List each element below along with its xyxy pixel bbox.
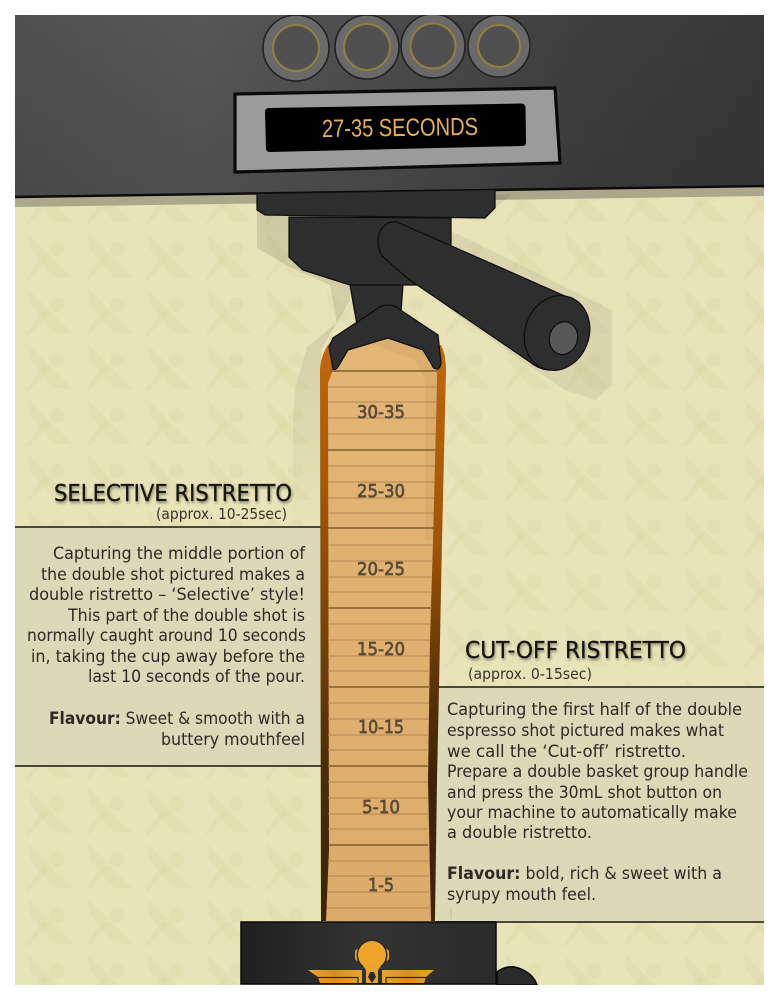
shot time scale lines xyxy=(327,387,437,908)
shot time labels: 15-20 xyxy=(357,640,405,660)
timer display xyxy=(235,88,560,172)
text: cut-off ristretto description: Capturing the first half of the double xyxy=(447,700,742,719)
logo emblem xyxy=(308,940,434,984)
timer display: 27-35 SECONDS xyxy=(322,113,478,143)
text: selective ristretto description: This part of the double shot is xyxy=(67,606,305,625)
heading: cut-off ristretto xyxy=(465,636,686,683)
handle grip xyxy=(378,222,600,380)
base block xyxy=(241,922,537,985)
espresso shot stream xyxy=(320,338,446,921)
text: cut-off ristretto description: and press the 30mL shot button on xyxy=(447,783,722,802)
shot time labels: 20-25 xyxy=(357,560,405,580)
text: selective ristretto description: in, taking the cup away before the xyxy=(31,647,305,666)
text: selective ristretto description xyxy=(27,544,306,749)
group handle xyxy=(257,190,600,380)
text: cut-off ristretto description xyxy=(447,700,748,904)
shot time labels: 25-30 xyxy=(357,482,405,502)
text: selective ristretto description: buttery mouthfeel xyxy=(161,730,305,749)
drop shadows of group handle and shot xyxy=(257,194,612,527)
shot time labels: 30-35 xyxy=(357,403,405,423)
text: cut-off ristretto description: syrupy mouth feel. xyxy=(447,885,596,904)
shot time labels: 1-5 xyxy=(368,876,394,896)
text: cut-off ristretto description: Prepare a double basket group handle xyxy=(447,762,748,781)
text: cut-off ristretto description: your machine to automatically make xyxy=(447,803,737,822)
panel: cut-off ristretto background xyxy=(436,686,764,923)
panel: selective ristretto background xyxy=(15,526,321,767)
machine body xyxy=(15,15,764,197)
shot time labels: 5-10 xyxy=(362,798,400,818)
group head buttons xyxy=(263,14,530,81)
text: selective ristretto description: last 10 seconds of the pour. xyxy=(88,667,305,686)
text: selective ristretto description: the double shot pictured makes a xyxy=(41,565,305,584)
text: selective ristretto description: normally caught around 10 seconds xyxy=(27,626,306,645)
text: selective ristretto description: Capturing the middle portion of xyxy=(53,544,306,563)
heading: selective ristretto: (approx. 10-25sec) xyxy=(156,505,287,523)
shot time labels xyxy=(357,403,405,896)
text: cut-off ristretto description: Flavour: bold, rich & sweet with a xyxy=(447,864,722,883)
text: selective ristretto description: double ristretto – ‘Selective’ style! xyxy=(29,585,305,604)
machine shadow xyxy=(15,186,764,207)
heading: cut-off ristretto: (approx. 0-15sec) xyxy=(468,665,592,683)
text: cut-off ristretto description: espresso shot pictured makes what xyxy=(447,721,724,740)
heading: selective ristretto: SELECTIVE RISTRETTO xyxy=(54,479,292,507)
heading: selective ristretto xyxy=(54,479,292,523)
shot time labels: 10-15 xyxy=(358,718,404,738)
text: selective ristretto description: Flavour: Sweet & smooth with a xyxy=(49,709,305,728)
heading: cut-off ristretto: CUT-OFF RISTRETTO xyxy=(465,636,686,664)
text: cut-off ristretto description: a double ristretto. xyxy=(447,823,592,842)
text: cut-off ristretto description: we call the ‘Cut-off’ ristretto. xyxy=(447,742,686,761)
